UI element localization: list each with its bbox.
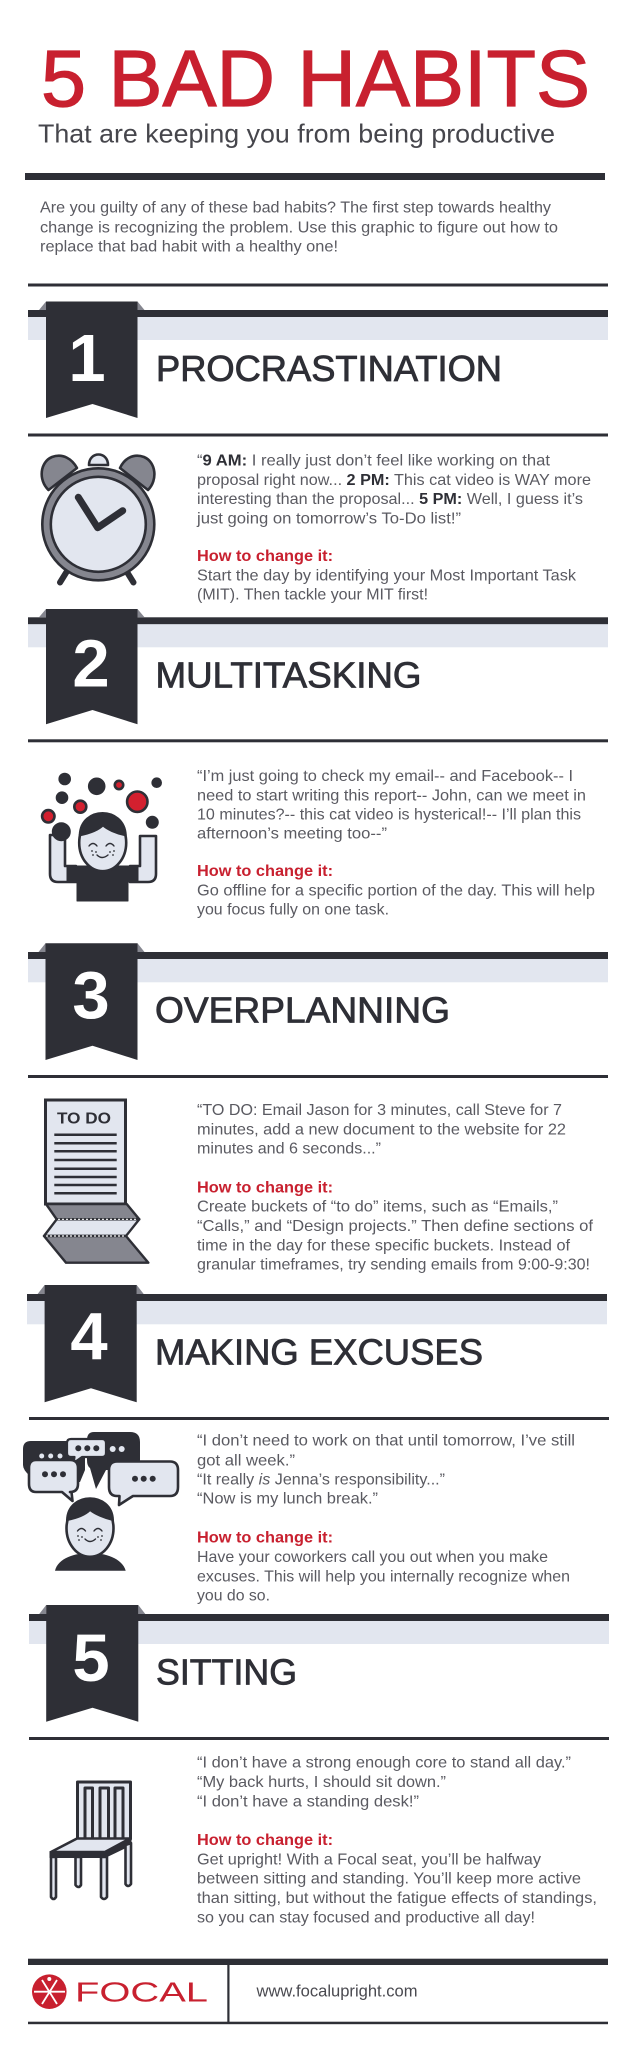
header band (28, 617, 608, 647)
intro text: Are you guilty of any of these bad habits? The first step towards healthy (40, 200, 551, 217)
ribbon number 1: 1 (68, 321, 106, 396)
ribbon number 5 (39, 1605, 145, 1722)
ribbon number 2: 2 (72, 627, 110, 702)
quote text: “My back hurts, I should sit down.” (197, 1774, 446, 1791)
quote text: “TO DO: Email Jason for 3 minutes, call Steve for 7 (197, 1102, 562, 1119)
panel: habit 4 making excuses (23, 1285, 609, 1605)
how to change it: Start the day by identifying your Most Important Task (197, 567, 577, 584)
quote text: 10 minutes?-- this cat video is hysterical!-- I’ll plan this (197, 806, 581, 823)
heading: PROCRASTINATION (156, 348, 502, 389)
ribbon number 3: 3 (72, 958, 110, 1033)
how to change it: Have your coworkers call you out when you make (197, 1549, 548, 1566)
quote text: minutes, add a new document to the website for 22 (197, 1121, 566, 1138)
how to change it (197, 548, 577, 603)
how to change it (197, 863, 595, 918)
how to change it (197, 1832, 597, 1926)
ribbon number 1 (39, 302, 144, 418)
how to change it: Create buckets of “to do” items, such as “Emails,” (197, 1199, 558, 1216)
quote text (197, 1102, 566, 1157)
ribbon number 4: 4 (70, 1299, 108, 1374)
how to change it: excuses. This will help you internally recognize when (197, 1568, 570, 1585)
how to change it (197, 1529, 570, 1605)
panel: habit 1 procrastination (28, 302, 608, 603)
how to change it: so you can stay focused and productive all day! (197, 1909, 535, 1926)
how to change it: than sitting, but without the fatigue effects of standings, (197, 1890, 597, 1907)
how to change it: you focus fully on one task. (197, 901, 389, 918)
website url: www.focalupright.com (256, 1982, 418, 2001)
icon: person juggling (42, 774, 161, 901)
quote text: “I don’t need to work on that until tomorrow, I’ve still (197, 1433, 575, 1450)
panel: habit 5 sitting (29, 1605, 609, 1926)
how to change it (197, 1179, 594, 1274)
quote text: “I’m just going to check my email-- and Facebook-- I (197, 768, 573, 785)
logo: focal (32, 1974, 208, 2009)
how to change it: Go offline for a specific portion of the day. This will help (197, 882, 595, 899)
footer (28, 1959, 608, 2024)
panel: habit 3 overplanning (28, 943, 608, 1274)
heading: SITTING (156, 1651, 297, 1692)
quote text (196, 452, 591, 527)
ribbon number 3 (38, 943, 144, 1060)
title: 5 BAD HABITS (41, 34, 590, 123)
quote text: proposal right now... 2 PM: This cat video is WAY more (197, 472, 591, 489)
header band (28, 310, 608, 340)
intro text: replace that bad habit with a healthy one! (40, 239, 338, 256)
header band (27, 1294, 607, 1324)
quote text: “It really is Jenna’s responsibility...” (197, 1472, 445, 1489)
how to change it: you do so. (197, 1588, 270, 1605)
quote text: need to start writing this report-- John, can we meet in (197, 787, 586, 804)
quote text (197, 1755, 571, 1810)
quote text: “9 AM: I really just don’t feel like working on that (197, 452, 551, 469)
heading: OVERPLANNING (155, 990, 450, 1031)
quote text: got all week.” (197, 1452, 295, 1469)
ribbon number 5: 5 (72, 1621, 110, 1696)
quote text: afternoon’s meeting too--” (197, 825, 387, 842)
how to change it: How to change it: (197, 548, 333, 565)
how to change it: between sitting and standing. You’ll keep more active (197, 1871, 581, 1888)
quote text: minutes and 6 seconds...” (197, 1140, 381, 1157)
how to change it: How to change it: (197, 863, 333, 880)
quote text (197, 768, 586, 842)
how to change it: granular timeframes, try sending emails from 9:00-9:30! (197, 1257, 590, 1274)
quote text: just going on tomorrow’s To-Do list!” (196, 510, 461, 527)
heading: MULTITASKING (156, 655, 422, 696)
panel: habit 2 multitasking (28, 609, 608, 918)
icon: person with speech bubbles (23, 1432, 178, 1571)
how to change it: time in the day for these specific buckets. Instead of (197, 1237, 571, 1254)
how to change it: How to change it: (197, 1179, 333, 1196)
quote text: “Now is my lunch break.” (197, 1491, 378, 1508)
heading: MAKING EXCUSES (155, 1331, 483, 1372)
icon: alarm clock (42, 454, 154, 582)
quote text: interesting than the proposal... 5 PM: Well, I guess it’s (197, 491, 583, 508)
intro text: change is recognizing the problem. Use this graphic to figure out how to (40, 219, 558, 236)
how to change it: How to change it: (197, 1832, 333, 1849)
ribbon number 4 (38, 1285, 144, 1402)
quote text: “I don’t have a strong enough core to stand all day.” (197, 1755, 571, 1772)
subtitle: That are keeping you from being productive (38, 119, 555, 149)
intro text (40, 200, 558, 256)
how to change it: Get upright! With a Focal seat, you’ll be halfway (197, 1851, 541, 1868)
logo: focal: FOCAL (75, 1977, 208, 2008)
quote text (197, 1433, 575, 1508)
header band (29, 1614, 609, 1644)
how to change it: “Calls,” and “Design projects.” Then define sections of (197, 1218, 594, 1235)
quote text: “I don’t have a standing desk!” (197, 1793, 419, 1810)
icon: to-do list (44, 1100, 148, 1263)
how to change it: How to change it: (197, 1529, 333, 1546)
ribbon number 2 (39, 609, 144, 724)
how to change it: (MIT). Then tackle your MIT first! (197, 586, 428, 603)
icon label: to do: TO DO (57, 1110, 111, 1127)
icon: chair (50, 1782, 131, 1899)
header band (28, 952, 608, 982)
